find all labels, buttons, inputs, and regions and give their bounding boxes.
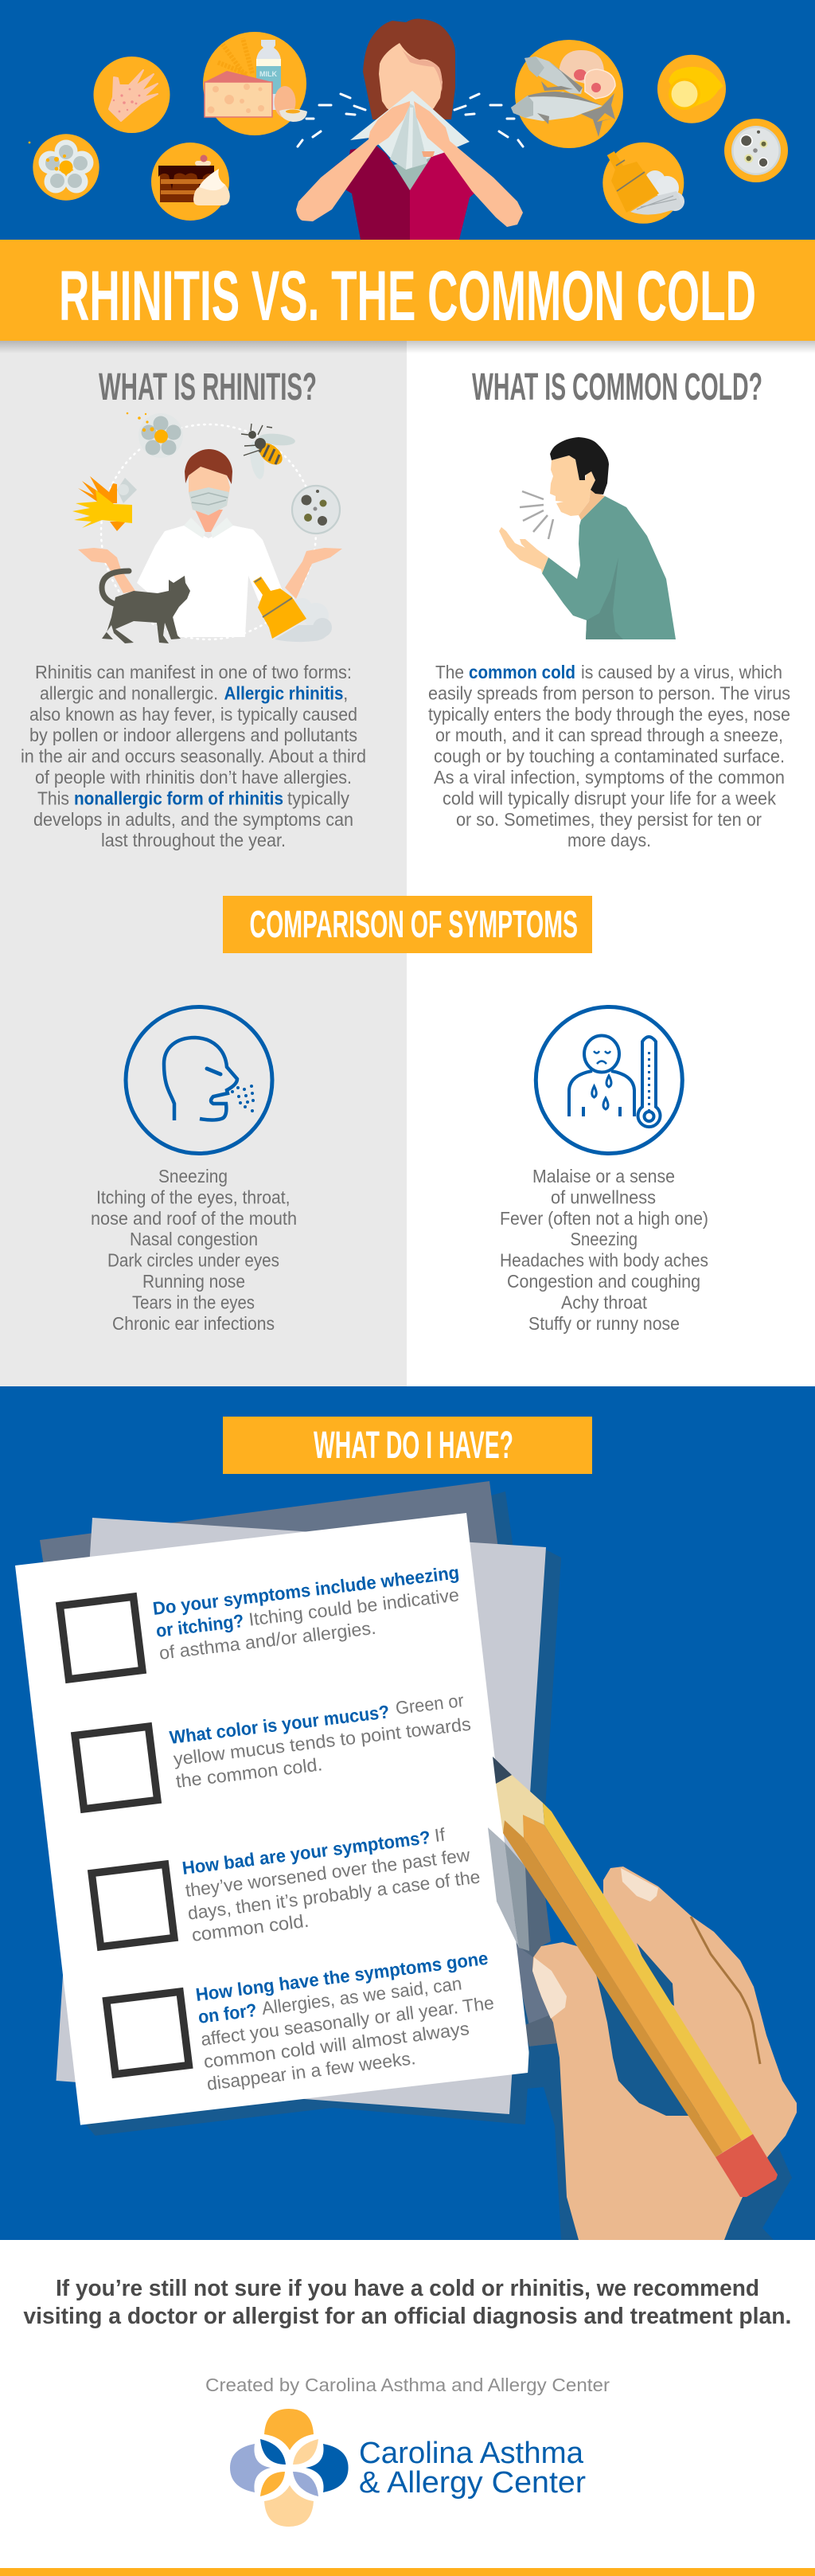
text: common cold description: typically enters the body through the eyes, nose: [428, 704, 790, 725]
text: rhinitis description: [21, 662, 366, 850]
question 4: disappear in a few weeks.: [205, 2047, 417, 2094]
question 3: days, then it’s probably a case of the: [186, 1866, 482, 1924]
icon: dairy and wheat: [203, 32, 307, 135]
logo: Carolina Asthma & Allergy Center: [230, 2409, 586, 2527]
text: common cold symptoms: Achy throat: [561, 1292, 648, 1312]
hair: [363, 19, 455, 119]
question 1: Do your symptoms include wheezing: [152, 1562, 460, 1619]
question 3: How bad are your symptoms?: [181, 1827, 431, 1878]
icon: gloves: [72, 476, 137, 531]
heading: what is rhinitis: WHAT IS RHINITIS?: [99, 366, 317, 408]
logo: Carolina Asthma & Allergy Center: Carolina Asthma: [359, 2437, 584, 2470]
question 4: on for?: [197, 1999, 258, 2027]
text: common cold symptoms: [500, 1166, 708, 1334]
question 4: common cold will almost always: [202, 2018, 470, 2072]
text: common cold description: is caused by a virus, which: [581, 662, 782, 682]
closing statement: visiting a doctor or allergist for an official diagnosis and treatment plan.: [23, 2304, 791, 2329]
text: rhinitis symptoms: Running nose: [142, 1271, 245, 1292]
text: rhinitis symptoms: Sneezing: [158, 1166, 228, 1186]
question 1: Itching could be indicative: [248, 1584, 460, 1630]
question 1: of asthma and/or allergies.: [158, 1617, 377, 1663]
middle sheet of paper: [56, 1518, 546, 2114]
paper stack shadows: [80, 1491, 561, 2136]
text: common cold symptoms: of unwellness: [551, 1186, 656, 1207]
heading: comparison of symptoms: COMPARISON OF SYMPTOMS: [250, 904, 578, 946]
logo: Carolina Asthma & Allergy Center: & Allergy Center: [359, 2466, 586, 2500]
icon: broom and dust: [602, 143, 684, 224]
slate shading beside the sheet: [509, 1867, 559, 2046]
question 3: they’ve worsened over the past few: [184, 1844, 471, 1901]
text: common cold description: As a viral infection, symptoms of the common: [434, 767, 785, 788]
face: [379, 43, 443, 118]
text: common cold description: more days.: [567, 830, 651, 850]
text: rhinitis description: last throughout the year.: [101, 830, 286, 850]
question 1: or itching?: [155, 1610, 245, 1641]
question 2: the common cold.: [175, 1753, 323, 1792]
text: rhinitis description: of people with rhinitis don’t have allergies.: [35, 767, 352, 788]
closing statement: If you’re still not sure if you have a cold or rhinitis, we recommend: [56, 2276, 759, 2301]
text: common cold description: [428, 662, 790, 850]
text: rhinitis description: also known as hay fever, is typically caused: [29, 704, 357, 725]
text: rhinitis description: Rhinitis can manifest in one of two forms:: [35, 662, 352, 682]
icon: petri dish: [724, 119, 788, 182]
arms: [296, 101, 410, 221]
text: rhinitis description: in the air and occurs seasonally. About a third: [21, 746, 366, 767]
icon: rash hand: [94, 57, 170, 133]
text: common cold description: common cold: [469, 662, 575, 682]
icon: dairy and wheat: MILK: [259, 70, 277, 78]
text: common cold symptoms: Stuffy or runny nose: [528, 1313, 680, 1334]
question 3: [181, 1824, 482, 1945]
icon: broom and dust: [253, 577, 332, 642]
question 2: Green or: [395, 1690, 465, 1718]
back sheet of paper: [40, 1481, 498, 1593]
text: rhinitis description: Allergic rhinitis: [224, 682, 344, 703]
question 3: If: [433, 1824, 446, 1846]
icon: petri dish: [292, 486, 340, 534]
text: common cold symptoms: Malaise or a sense: [532, 1166, 675, 1186]
checkbox 4: [107, 1992, 189, 2074]
illustration: hand holding pencil: [493, 1757, 797, 2240]
shirt: [344, 146, 410, 240]
question 4: affect you seasonally or all year. The: [200, 1992, 495, 2050]
icon: cake: [151, 143, 230, 221]
text: rhinitis description: ,: [343, 682, 348, 703]
question 4: Allergies, as we said, can: [260, 1972, 463, 2019]
icon: sneezing head: [126, 1007, 272, 1153]
question 4: [194, 1948, 495, 2094]
text: rhinitis description: nonallergic form of rhinitis: [74, 788, 283, 808]
text: common cold symptoms: Headaches with body aches: [500, 1250, 708, 1271]
gaps between fingers: [585, 1943, 700, 2116]
text: common cold description: The: [435, 662, 464, 682]
fingernails: [532, 1868, 658, 2019]
text: rhinitis description: allergic and nonallergic.: [40, 682, 218, 703]
text: rhinitis description: develops in adults, and the symptoms can: [33, 809, 353, 830]
illustration: allergy person: [72, 412, 342, 643]
illustration: sneezing man: [499, 437, 676, 639]
white checklist sheet: [15, 1513, 532, 2125]
text: common cold description: or mouth, and it can spread through a sneeze,: [435, 725, 783, 745]
panel: what is common cold: [428, 366, 790, 850]
question 2: [169, 1690, 472, 1792]
panel: header illustration: [0, 0, 815, 240]
face and hair: [189, 467, 230, 515]
heading: comparison of symptoms: [223, 896, 592, 953]
panel: rhinitis column background: [0, 341, 407, 1386]
shirt: [137, 526, 283, 637]
text: common cold description: cough or by touching a contaminated surface.: [434, 746, 785, 767]
text: rhinitis symptoms: Itching of the eyes, throat,: [96, 1186, 290, 1207]
arms: [78, 548, 135, 593]
text: rhinitis symptoms: nose and roof of the mouth: [91, 1208, 297, 1229]
text: rhinitis symptoms: Nasal congestion: [130, 1229, 258, 1249]
panel: what is rhinitis: [21, 366, 366, 850]
icon: bee: [241, 424, 296, 480]
footer bar: [0, 2568, 815, 2576]
icon: cat: [102, 571, 190, 643]
text: rhinitis symptoms: Dark circles under eyes: [107, 1250, 279, 1271]
text: rhinitis description: typically: [287, 788, 349, 808]
question 1: [152, 1562, 460, 1663]
closing statement: [23, 2276, 791, 2329]
text: common cold symptoms: Congestion and coughing: [507, 1271, 700, 1292]
icon: fish and shellfish: [511, 40, 623, 148]
hand shadow: [527, 2043, 792, 2240]
icon: sneeze spray: [298, 94, 523, 147]
question 4: How long have the symptoms gone: [194, 1948, 489, 2005]
text: common cold symptoms: Fever (often not a high one): [500, 1208, 708, 1229]
text: rhinitis symptoms: [91, 1166, 297, 1334]
text: rhinitis description: by pollen or indoor allergens and pollutants: [29, 725, 357, 745]
icon: feverish person with thermometer: [536, 1007, 682, 1153]
text: common cold description: or so. Sometimes, they persist for ten or: [456, 809, 762, 830]
illustration: sneezing woman: [296, 19, 523, 240]
icon: flower: [127, 412, 183, 458]
heading: what do i have: WHAT DO I HAVE?: [314, 1425, 513, 1467]
question 2: What color is your mucus?: [169, 1701, 391, 1748]
text: rhinitis symptoms: Chronic ear infections: [112, 1313, 275, 1334]
question 2: yellow mucus tends to point towards: [173, 1714, 472, 1769]
icon: flower: [29, 134, 99, 201]
text: common cold description: easily spreads from person to person. The virus: [428, 682, 790, 703]
text: common cold description: cold will typically disrupt your life for a week: [443, 788, 776, 808]
question 3: common cold.: [190, 1910, 310, 1945]
heading: what do i have: [223, 1417, 592, 1474]
tissue: [350, 91, 470, 170]
icon: pencil: [493, 1757, 778, 2197]
icon: lemon: [657, 55, 726, 123]
checkbox 2: [75, 1726, 158, 1809]
text: rhinitis description: This: [37, 788, 69, 808]
checkbox 3: [92, 1864, 174, 1947]
logo mark: [230, 2409, 349, 2527]
checkbox 1: [60, 1597, 142, 1679]
credit line: Created by Carolina Asthma and Allergy Center: [205, 2375, 610, 2395]
text: common cold symptoms: Sneezing: [570, 1229, 638, 1249]
text: rhinitis symptoms: Tears in the eyes: [132, 1292, 255, 1312]
panel: what do i have: [0, 1386, 815, 2240]
